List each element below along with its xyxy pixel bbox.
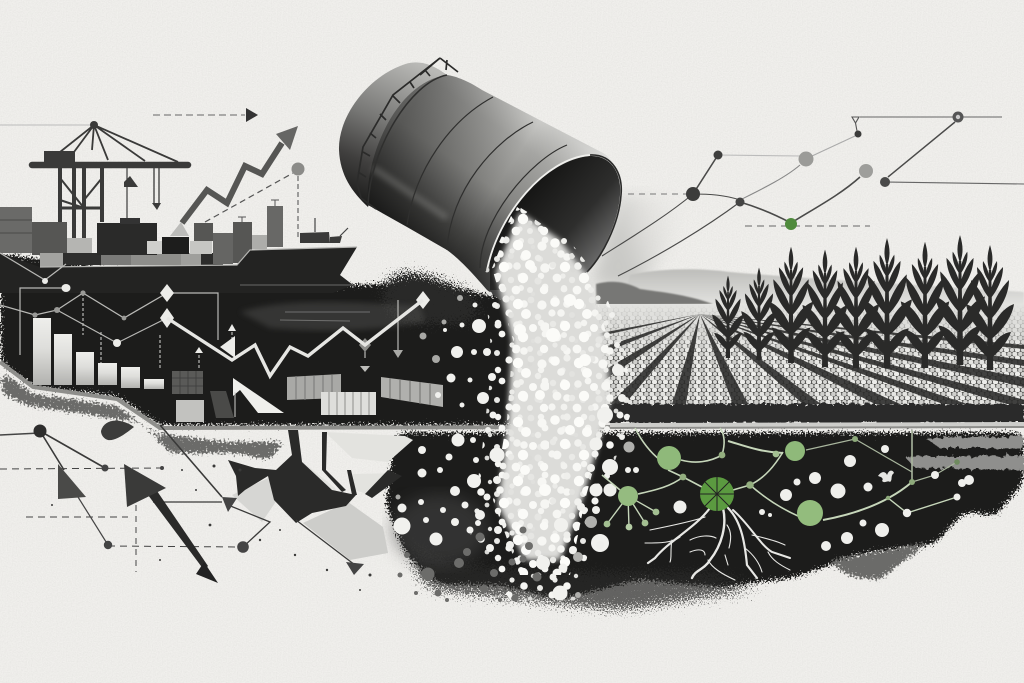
tank back dome: [339, 62, 447, 207]
tank rim: [487, 155, 590, 270]
panel: distant hills: [596, 269, 1024, 310]
stream highlights: [514, 260, 591, 535]
zigzag trend line: [167, 300, 423, 376]
small triangle: [58, 464, 86, 499]
dark cracks: [228, 430, 402, 523]
tank ladder: [357, 58, 458, 209]
green network lines: [602, 428, 957, 527]
network nodes: [686, 112, 964, 230]
green nodes: [604, 436, 960, 530]
grey streaks in band: [240, 302, 425, 330]
ship cabin: [300, 232, 342, 243]
big down arrow: [124, 464, 218, 583]
panel: cracked earth: [0, 368, 413, 560]
bar chart: [33, 318, 164, 389]
granules in right soil: [592, 445, 889, 551]
tank: [339, 58, 621, 300]
panel: root and microbe network: [602, 428, 974, 580]
speckle by the bow: [372, 268, 490, 325]
lower left diagram arrows: [0, 421, 364, 583]
scattered granules left: [394, 302, 514, 552]
tank seams: [368, 75, 567, 268]
line chart: [0, 253, 430, 372]
speckled dots under cracks: [51, 424, 372, 591]
ground containers: [172, 371, 443, 422]
light cone from tank mouth: [590, 195, 700, 290]
ground strip: [0, 362, 1024, 428]
field soil edge: [600, 404, 1024, 423]
panel: port ground, dark band: [0, 253, 520, 426]
white wedge: [233, 378, 284, 413]
tank mouth: [490, 156, 620, 290]
container right: [381, 377, 443, 407]
container white: [321, 392, 376, 415]
granule stream: [394, 205, 889, 602]
container grey: [287, 374, 341, 400]
stacked shipping containers: [0, 200, 283, 267]
stream glow base: [496, 212, 610, 560]
scattered granules right: [536, 312, 631, 600]
crack plates: [232, 432, 413, 560]
tank body: [368, 75, 620, 300]
chart markers: [32, 278, 430, 372]
drop marker: [101, 421, 134, 440]
rising arrow: [170, 126, 304, 238]
top dashed arrow: [153, 108, 258, 122]
stream outer dots: [470, 205, 632, 600]
panel: crop field rows: [596, 304, 1024, 423]
panel: underground soil: [385, 432, 1024, 612]
small crack triangles: [222, 497, 237, 512]
scattered grey granules lower: [398, 526, 542, 602]
port crane: [0, 121, 188, 238]
field furrows: [596, 314, 1024, 404]
microbe icon: [878, 471, 894, 482]
network chart: upper right: [602, 112, 1024, 276]
mottled terrain: [0, 368, 290, 462]
white nodes on network: [903, 471, 974, 517]
stream dense dots: [492, 207, 612, 575]
corn plants: [712, 235, 1014, 370]
speckled fringe lower right: [820, 522, 965, 582]
cargo ship: [0, 218, 357, 293]
light stripes in soil: [905, 436, 1024, 470]
plant roots: [645, 508, 790, 580]
mottled soil patch: [392, 494, 488, 566]
